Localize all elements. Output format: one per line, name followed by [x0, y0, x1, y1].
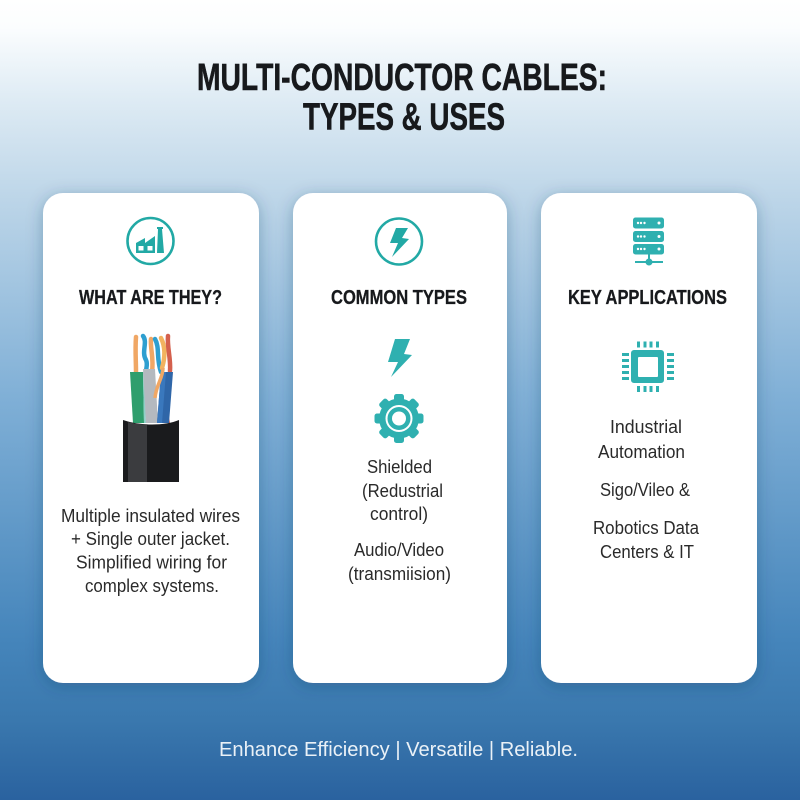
text: description: complex systems.	[85, 575, 219, 596]
text: description	[61, 505, 240, 596]
icon: bolt in circle	[376, 218, 422, 264]
text: applications list: Automation	[598, 441, 685, 462]
text: applications list: Centers & IT	[600, 541, 694, 562]
icon: gear	[374, 394, 424, 443]
text: types list: Audio/Video	[354, 539, 444, 560]
panel: common types	[293, 193, 507, 683]
icon: bolt	[388, 339, 412, 377]
icon: chip	[622, 342, 674, 392]
text: description: Simplified wiring for	[76, 552, 227, 572]
text: types list: control)	[370, 503, 428, 524]
footer tagline: Enhance Efficiency | Versatile | Reliable.	[219, 739, 578, 761]
heading: common types: COMMON TYPES	[331, 287, 467, 309]
text: types list: (transmiision)	[348, 563, 451, 584]
title	[197, 57, 607, 138]
text: applications list: Sigo/Vileo &	[600, 479, 691, 500]
panel: key applications	[541, 193, 757, 683]
text: types list	[348, 456, 451, 584]
text: applications list: Robotics Data	[593, 517, 700, 538]
text: types list: (Redustrial	[362, 480, 443, 501]
illustration: cable	[123, 336, 179, 482]
text: applications list	[593, 416, 700, 562]
panel: what are they	[43, 193, 259, 683]
title: TYPES & USES	[303, 96, 505, 138]
heading: what are they: WHAT ARE THEY?	[79, 287, 222, 309]
heading: key applications: KEY APPLICATIONS	[568, 287, 727, 309]
icon: server	[633, 218, 664, 266]
text: description: Multiple insulated wires	[61, 505, 240, 526]
text: types list: Shielded	[367, 456, 432, 477]
text: applications list: Industrial	[610, 416, 682, 437]
text: description: + Single outer jacket.	[71, 528, 230, 549]
title: MULTI-CONDUCTOR CABLES:	[197, 57, 607, 99]
icon: factory	[128, 218, 174, 264]
